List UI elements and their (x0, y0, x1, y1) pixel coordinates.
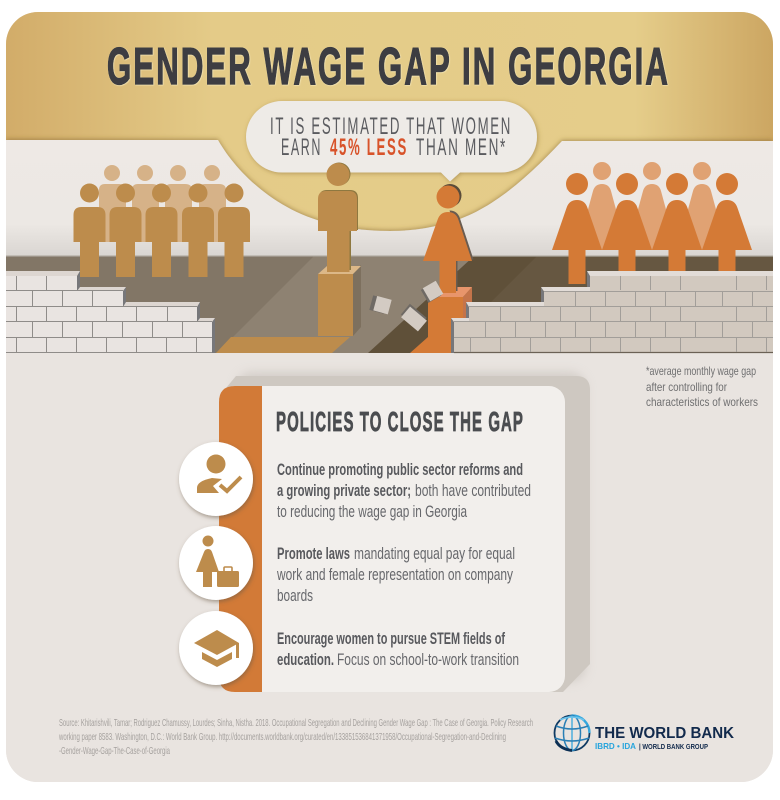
panel heading: POLICIES TO CLOSE THE GAP (276, 406, 524, 437)
right brick wall (451, 271, 773, 353)
icon: woman with briefcase (179, 526, 253, 600)
bubble line 2 (281, 134, 507, 161)
bubble line 2: THAN MEN* (416, 134, 507, 161)
source text (58, 717, 533, 757)
World Bank logo (554, 716, 735, 751)
policy 1 text: both have contributed (415, 481, 531, 500)
policy 3 text: education. (277, 650, 334, 669)
policy 1 text: to reducing the wage gap in Georgia (277, 502, 467, 521)
orange band (219, 386, 262, 692)
group of men (74, 165, 250, 277)
man's pedestal (216, 265, 361, 353)
policies panel (179, 372, 590, 692)
policy 1 text: a growing private sector; (277, 481, 411, 500)
footnote: after controlling for (646, 380, 727, 394)
policy 2 text: mandating equal pay for equal (354, 544, 515, 563)
footnote (646, 364, 758, 409)
tagline blue: IBRD • IDA (595, 741, 636, 751)
card face (219, 386, 565, 692)
policy 1 text (277, 460, 531, 521)
center woman (423, 184, 474, 293)
icon: graduation cap (179, 611, 253, 685)
bubble line 1: IT IS ESTIMATED THAT WOMEN (270, 113, 512, 140)
wordmark: THE WORLD BANK (595, 725, 735, 742)
policy 2 text (276, 544, 515, 605)
tagline dark: | WORLD BANK GROUP (639, 742, 708, 751)
policy 3 text: Focus on school-to-work transition (337, 650, 519, 669)
floor (6, 256, 773, 353)
policy 2 text: boards (277, 586, 313, 605)
back wall with bubble-shaped cutout (6, 140, 773, 257)
left brick wall (6, 271, 215, 353)
center man (318, 162, 358, 272)
icon: person with check mark (179, 442, 253, 516)
back panel shadow (236, 372, 586, 682)
back panel (226, 376, 590, 692)
lower panel strip (6, 353, 773, 782)
bubble line 2: EARN (281, 134, 322, 161)
policy 3 text: Encourage women to pursue STEM fields of (277, 629, 505, 648)
gold header band (6, 12, 773, 237)
policy 3 text (277, 629, 519, 669)
policy 1 text: Continue promoting public sector reforms and (277, 460, 523, 479)
policy 2 text: work and female representation on company (276, 565, 513, 584)
bubble line 2: 45% LESS (330, 134, 408, 161)
policy 2 text: Promote laws (277, 544, 350, 563)
icon: globe (554, 716, 590, 750)
falling bricks (369, 281, 443, 331)
group of women (552, 162, 752, 284)
source text: -Gender-Wage-Gap-The-Case-of-Georgia (59, 745, 170, 757)
speech bubble (246, 101, 537, 182)
footnote: characteristics of workers (646, 395, 758, 409)
woman's pedestal (410, 287, 472, 353)
